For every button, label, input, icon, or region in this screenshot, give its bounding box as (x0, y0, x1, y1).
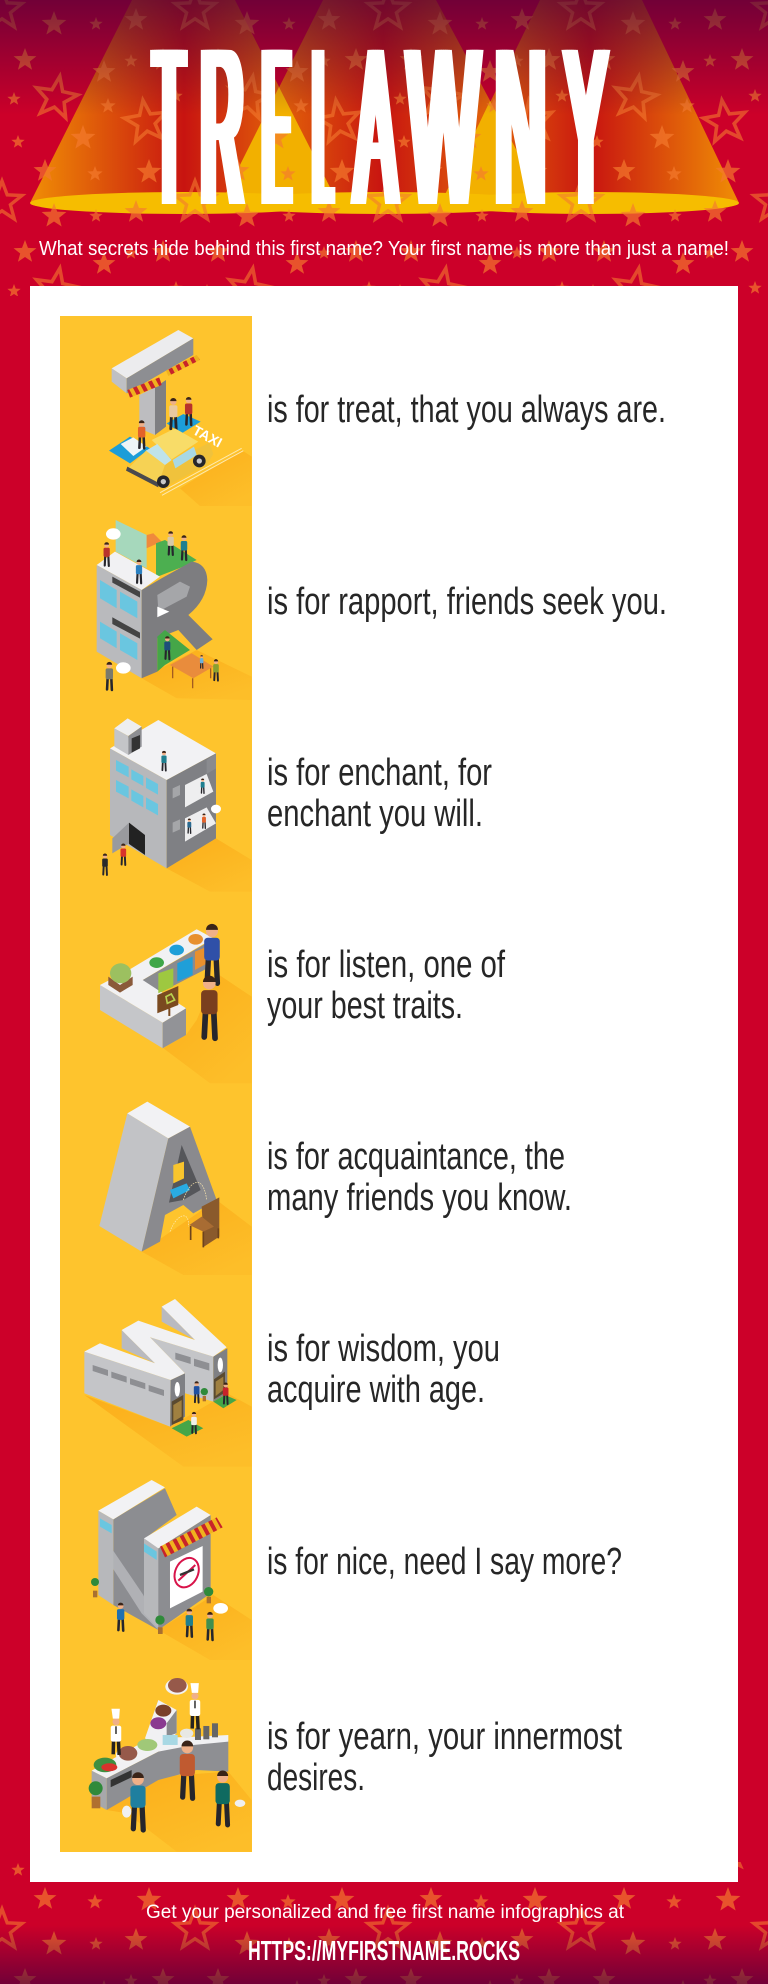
footer line: Get your personalized and free first name infographics at (146, 1902, 625, 1923)
panel: white content card (30, 286, 738, 1882)
text: W lines: acquire with age. (267, 1369, 485, 1411)
text: L lines (267, 944, 505, 1027)
text: E lines: enchant you will. (267, 793, 483, 835)
dark vignette bottom (0, 1925, 768, 1984)
title: N (490, 2, 541, 252)
icon: letter T with taxi: TAXI (190, 422, 225, 450)
text: N line: is for nice, need I say more? (267, 1541, 622, 1583)
text: A lines: many friends you know. (267, 1177, 572, 1219)
icon: letter N shop (91, 1480, 252, 1660)
dark vignette top (0, 0, 768, 115)
footer url: HTTPS://MYFIRSTNAME.ROCKS (248, 1935, 520, 1966)
title: W (403, 2, 474, 252)
star pattern: footer (0, 1862, 768, 1984)
text: Y lines: desires. (267, 1757, 365, 1799)
icon: letter R building (97, 520, 252, 700)
title: E (258, 2, 285, 252)
text: A lines (267, 1136, 572, 1219)
subtitle: What secrets hide behind this first name? Your first name is more than just a name! (39, 238, 729, 260)
text: W lines: is for wisdom, you (267, 1328, 500, 1370)
title (149, 2, 610, 252)
text: A lines: is for acquaintance, the (267, 1136, 565, 1178)
title: L (309, 2, 326, 252)
text: L lines: your best traits. (267, 985, 463, 1027)
title: T (149, 2, 179, 252)
title: A (350, 2, 391, 252)
icon: letter W building (84, 1299, 252, 1467)
title: R (196, 2, 238, 252)
panel: yellow illustration column (60, 316, 252, 1852)
text: E lines (267, 752, 492, 835)
text: W lines (267, 1328, 500, 1411)
text: Y lines: is for yearn, your innermost (267, 1716, 622, 1758)
text: L lines: is for listen, one of (267, 944, 505, 986)
icon: letter T with taxi (109, 330, 252, 506)
spotlight cones (30, 0, 739, 214)
star pattern: header (0, 0, 768, 296)
icon: letter E building (102, 718, 252, 892)
text: Y lines (267, 1716, 622, 1799)
icon: letter A with desk (99, 1102, 252, 1275)
text: E lines: is for enchant, for (267, 752, 492, 794)
title: Y (560, 2, 602, 252)
icon: letter L recycling bins (100, 924, 252, 1083)
icon: letter Y buffet (89, 1678, 252, 1852)
